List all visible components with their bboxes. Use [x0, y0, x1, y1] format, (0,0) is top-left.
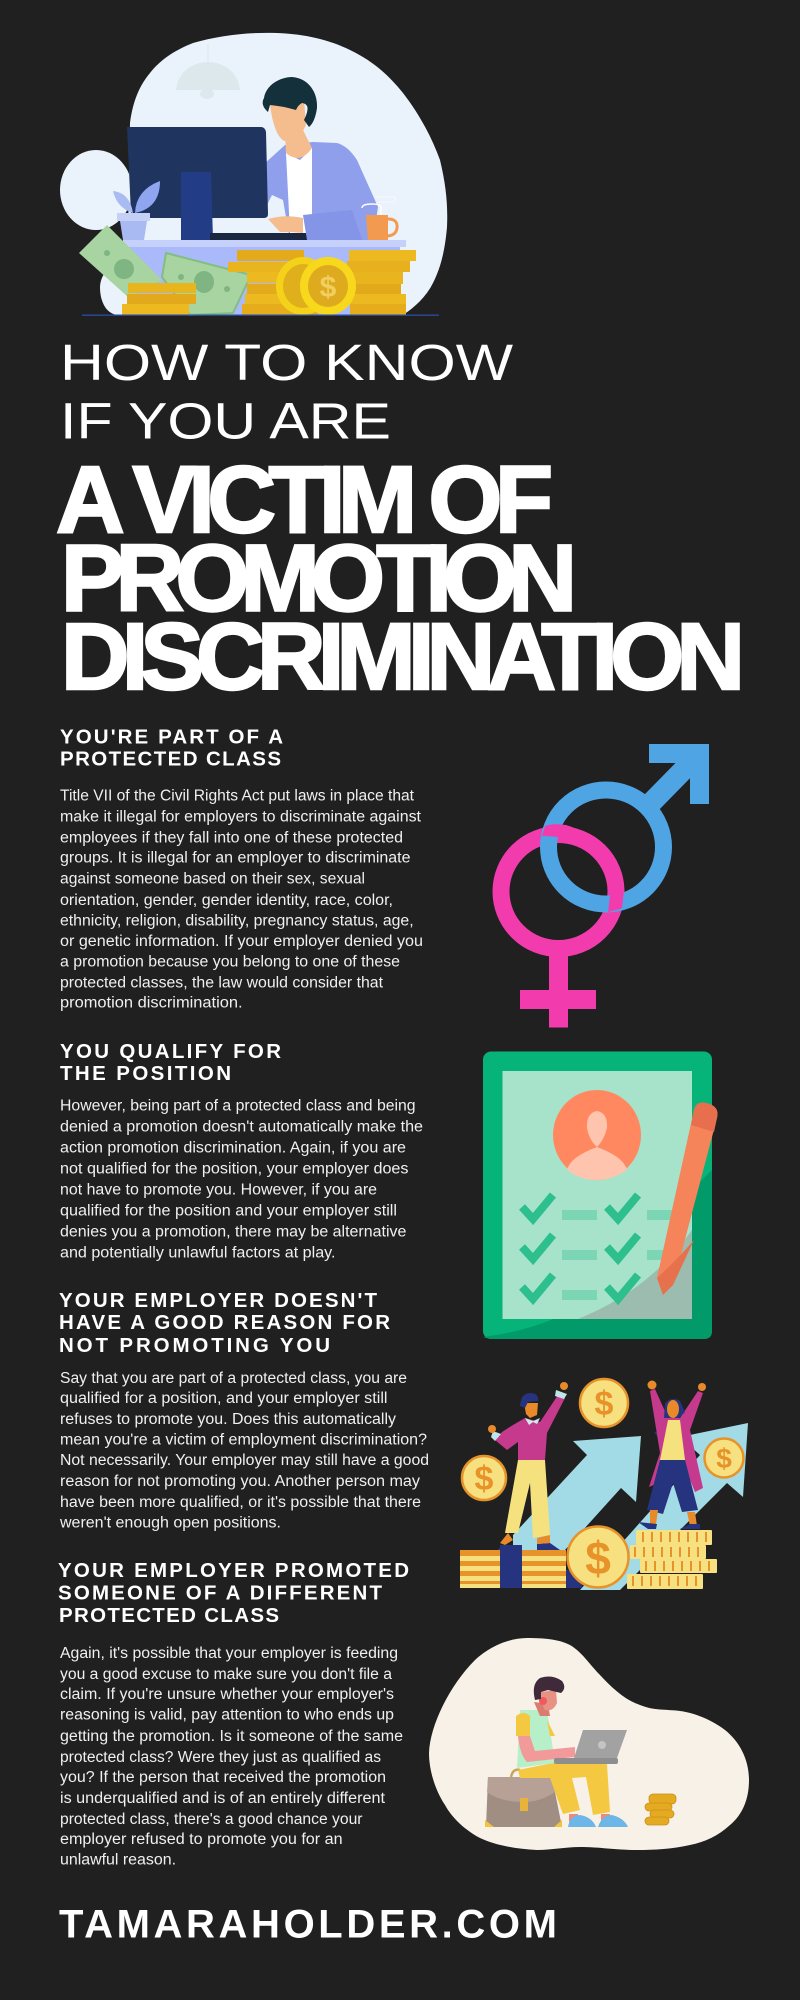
body text: no good reason: refuses to promote you. Does this automatically	[60, 1411, 396, 1428]
hero illustration: man at desk with money: $	[320, 271, 337, 304]
section heading: different protected class: YOUR EMPLOYER PROMOTED	[58, 1559, 409, 1582]
section heading: no good reason	[59, 1289, 390, 1357]
section heading: protected class: PROTECTED CLASS	[60, 748, 281, 770]
icon: resume checklist with pencil	[483, 1052, 718, 1339]
section heading: qualify for the position	[60, 1040, 281, 1085]
body text: different protected class: is underqualified and is of an entirely different	[60, 1790, 386, 1807]
illustration: people climbing growth arrows with coins: $	[475, 1460, 494, 1498]
body text: no good reason: qualified for a position, and your employer still	[60, 1390, 388, 1407]
body text: no good reason: have been more qualified, or it's possible that there	[60, 1494, 421, 1511]
body text: no good reason: mean you're a victim of employment discrimination?	[60, 1432, 427, 1449]
body text: different protected class: you a good excuse to make sure you don't file a	[60, 1666, 392, 1683]
body text: different protected class: protected class? Were they just as qualified as	[60, 1749, 381, 1766]
footer website: TAMARAHOLDER.COM	[59, 1902, 557, 1946]
body text: protected class: or genetic information. If your employer denied you	[60, 933, 423, 950]
body text: protected class: against someone based on their sex, sexual	[60, 871, 365, 888]
body text: qualify for the position: not qualified for the position, your employer does	[60, 1160, 409, 1178]
icon: interlocked gender symbols	[501, 744, 709, 1028]
body text: qualify for the position: However, being part of a protected class and being	[60, 1097, 416, 1114]
body text: different protected class: claim. If you're unsure whether your employer's	[60, 1686, 394, 1703]
illustration: people climbing growth arrows with coins: $	[595, 1385, 614, 1423]
body text: qualify for the position: and potentially unlawful factors at play.	[60, 1245, 336, 1262]
section heading: no good reason: YOUR EMPLOYER DOESN'T	[59, 1289, 377, 1312]
body text: different protected class: employer refused to promote you for an	[60, 1831, 343, 1848]
body text: different protected class: unlawful reason.	[60, 1852, 176, 1868]
hero illustration: man at desk with money	[60, 33, 447, 316]
body text: qualify for the position: qualified for the position and your employer still	[60, 1202, 397, 1219]
body text: no good reason: Not necessarily. Your employer may still have a good	[60, 1452, 429, 1469]
body text: protected class: Title VII of the Civil Rights Act put laws in place that	[60, 788, 415, 805]
section heading: no good reason: NOT PROMOTING YOU	[59, 1334, 330, 1357]
section heading: different protected class: PROTECTED CLASS	[59, 1604, 279, 1627]
section heading: qualify for the position: YOU QUALIFY FOR	[60, 1040, 281, 1063]
section heading: no good reason: HAVE A GOOD REASON FOR	[59, 1311, 390, 1334]
body text: protected class: promotion discrimination.	[60, 995, 243, 1012]
section heading: different protected class: SOMEONE OF A DIFFERENT	[58, 1582, 382, 1605]
title: DISCRIMINATION	[61, 604, 745, 710]
body text: qualify for the position: action promotion discrimination. Again, if you are	[60, 1139, 406, 1156]
illustration: people climbing growth arrows with coins: $	[716, 1443, 732, 1474]
illustration: people climbing growth arrows with coins	[460, 1379, 748, 1590]
body text: protected class: employees if they fall into one of these protected	[60, 830, 403, 847]
body text: no good reason: Say that you are part of a protected class, you are	[60, 1370, 407, 1387]
body text: protected class: protected classes, the law would consider that	[60, 975, 384, 992]
title: PROMOTION	[61, 526, 577, 632]
body text: protected class: ethnicity, religion, disability, pregnancy status, age,	[60, 912, 414, 930]
body text: different protected class	[60, 1645, 403, 1868]
title: IF YOU ARE	[60, 392, 391, 450]
body text: qualify for the position	[60, 1097, 423, 1262]
body text: no good reason: reason for not promoting you. Another person may	[60, 1473, 420, 1490]
body text: different protected class: protected class, there's a good chance your	[60, 1811, 362, 1828]
body text: protected class	[60, 788, 423, 1012]
body text: qualify for the position: not have to promote you. However, if you are	[60, 1182, 377, 1199]
title: HOW TO KNOW	[60, 334, 513, 391]
body text: different protected class: Again, it's possible that your employer is feeding	[60, 1645, 398, 1662]
body text: no good reason	[59, 1370, 429, 1531]
section heading: qualify for the position: THE POSITION	[60, 1062, 231, 1085]
body text: different protected class: reasoning is valid, pay attention to who ends up	[60, 1707, 394, 1724]
illustration: people climbing growth arrows with coins: $	[585, 1532, 611, 1584]
section heading: different protected class	[58, 1559, 409, 1627]
illustration: worker with laptop on briefcase	[429, 1638, 749, 1850]
body text: no good reason: weren't enough open positions.	[59, 1514, 281, 1531]
body text: qualify for the position: denies you a promotion, there may be alternative	[60, 1224, 406, 1240]
body text: different protected class: you? If the person that received the promotion	[60, 1769, 386, 1786]
body text: protected class: groups. It is illegal for an employer to discriminate	[60, 850, 410, 866]
body text: protected class: make it illegal for employers to discriminate against	[60, 808, 422, 826]
title: A VICTIM OF	[56, 447, 553, 553]
section heading: protected class: YOU'RE PART OF A	[60, 726, 283, 748]
body text: protected class: a promotion because you belong to one of these	[60, 954, 400, 971]
body text: different protected class: getting the promotion. Is it someone of the same	[60, 1728, 403, 1745]
title	[56, 334, 745, 710]
section heading: protected class	[60, 726, 283, 770]
body text: protected class: orientation, gender, gender identity, race, color,	[60, 892, 393, 909]
body text: qualify for the position: denied a promotion doesn't automatically make the	[60, 1119, 423, 1136]
